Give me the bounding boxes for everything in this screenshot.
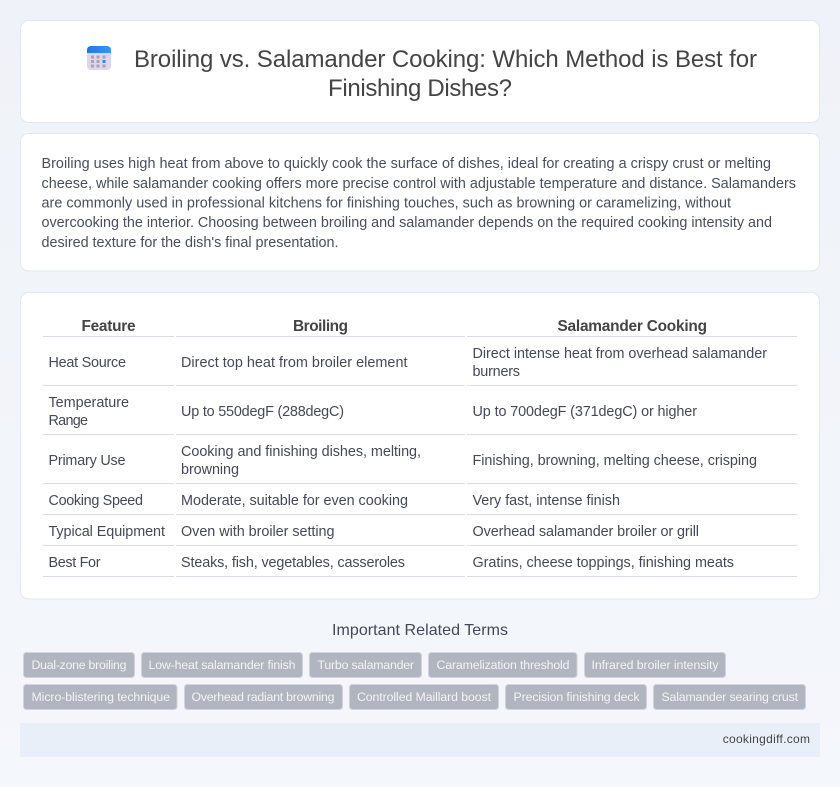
row: primary use: Finishing, browning, melting cheese, crisping: [472, 453, 757, 469]
intro paragraph: cheese, while salamander cooking offers more precise control with adjustable temperature and distance. Salamanders: [42, 176, 796, 192]
intro paragraph: desired texture for the dish's final presentation.: [42, 235, 338, 251]
tag: turbo salamander: Turbo salamander: [318, 658, 414, 672]
row: cooking speed: Very fast, intense finish: [472, 493, 620, 509]
row: typical equipment: [48, 524, 699, 540]
tag: low-heat salamander finish: Low-heat salamander finish: [148, 658, 296, 672]
row: cooking speed: Moderate, suitable for even cooking: [181, 493, 408, 509]
tag: dual-zone broiling: [24, 652, 134, 678]
row: typical equipment: Overhead salamander broiler or grill: [472, 524, 699, 540]
title: Finishing Dishes?: [328, 75, 512, 102]
intro paragraph: are commonly used in professional kitchens for finishing touches, such as browning or caramelizing, without: [42, 196, 731, 212]
row: heat source: Heat Source: [48, 355, 126, 371]
tag: low-heat salamander finish: [142, 652, 302, 678]
row: heat source: [48, 346, 767, 380]
tag: micro-blistering technique: [24, 684, 177, 710]
tag: precision finishing deck: [506, 684, 646, 710]
panel: introduction text: [20, 134, 820, 271]
table header row: [82, 318, 707, 335]
tag: controlled maillard boost: [350, 684, 498, 710]
tag: precision finishing deck: Precision finishing deck: [514, 690, 640, 704]
row: primary use: [48, 444, 757, 478]
row: temperature range: Up to 550degF (288degC): [181, 404, 344, 420]
tag: turbo salamander: [310, 652, 422, 678]
row: temperature range: Temperature: [48, 395, 129, 411]
table header row: Broiling: [293, 318, 348, 335]
row: heat source: Direct top heat from broiler element: [181, 355, 408, 371]
row: temperature range: Up to 700degF (371degC) or higher: [472, 404, 697, 420]
tag: caramelization threshold: Caramelization threshold: [436, 658, 570, 672]
icon: calendar: [87, 46, 111, 70]
related terms heading: Important Related Terms: [332, 622, 508, 639]
intro paragraph: Broiling uses high heat from above to quickly cook the surface of dishes, ideal for creating a crispy crust or melting: [42, 156, 771, 172]
table header row: Salamander Cooking: [558, 318, 707, 335]
row: best for: Steaks, fish, vegetables, casseroles: [181, 555, 405, 571]
row: best for: Best For: [48, 555, 101, 571]
row: heat source: burners: [472, 364, 520, 380]
row: temperature range: Range: [48, 413, 88, 429]
related terms tags: [24, 652, 806, 710]
tag: salamander searing crust: [654, 684, 806, 710]
tag: dual-zone broiling: Dual-zone broiling: [32, 658, 127, 672]
row: primary use: Cooking and finishing dishes, melting,: [181, 444, 421, 460]
row: best for: Gratins, cheese toppings, finishing meats: [472, 555, 734, 571]
tag: caramelization threshold: [428, 652, 577, 678]
tag: salamander searing crust: Salamander searing crust: [662, 690, 799, 704]
row: primary use: browning: [181, 462, 239, 478]
footer source: cookingdiff.com: [723, 732, 810, 746]
panel: comparison table: [20, 292, 820, 599]
panel: title header: [20, 20, 820, 122]
tag: micro-blistering technique: Micro-blistering technique: [32, 690, 170, 704]
row: temperature range: [48, 395, 697, 429]
tag: overhead radiant browning: Overhead radiant browning: [192, 690, 335, 704]
tag: overhead radiant browning: [184, 684, 342, 710]
tag: controlled maillard boost: Controlled Maillard boost: [357, 690, 492, 704]
row: cooking speed: Cooking Speed: [48, 493, 143, 509]
footer bar: [20, 723, 820, 757]
row: heat source: Direct intense heat from overhead salamander: [472, 346, 767, 362]
row: primary use: Primary Use: [48, 453, 126, 469]
intro paragraph: overcooking the interior. Choosing between broiling and salamander depends on the required cooking intensity and: [42, 215, 772, 231]
title: Broiling vs. Salamander Cooking: Which Method is Best for: [134, 46, 757, 73]
row: typical equipment: Typical Equipment: [48, 524, 165, 540]
row: typical equipment: Oven with broiler setting: [181, 524, 334, 540]
row: best for: [48, 555, 734, 571]
tag: infrared broiler intensity: Infrared broiler intensity: [592, 658, 719, 672]
row: cooking speed: [48, 493, 620, 509]
tag: infrared broiler intensity: [584, 652, 726, 678]
table header row: Feature: [82, 318, 136, 335]
